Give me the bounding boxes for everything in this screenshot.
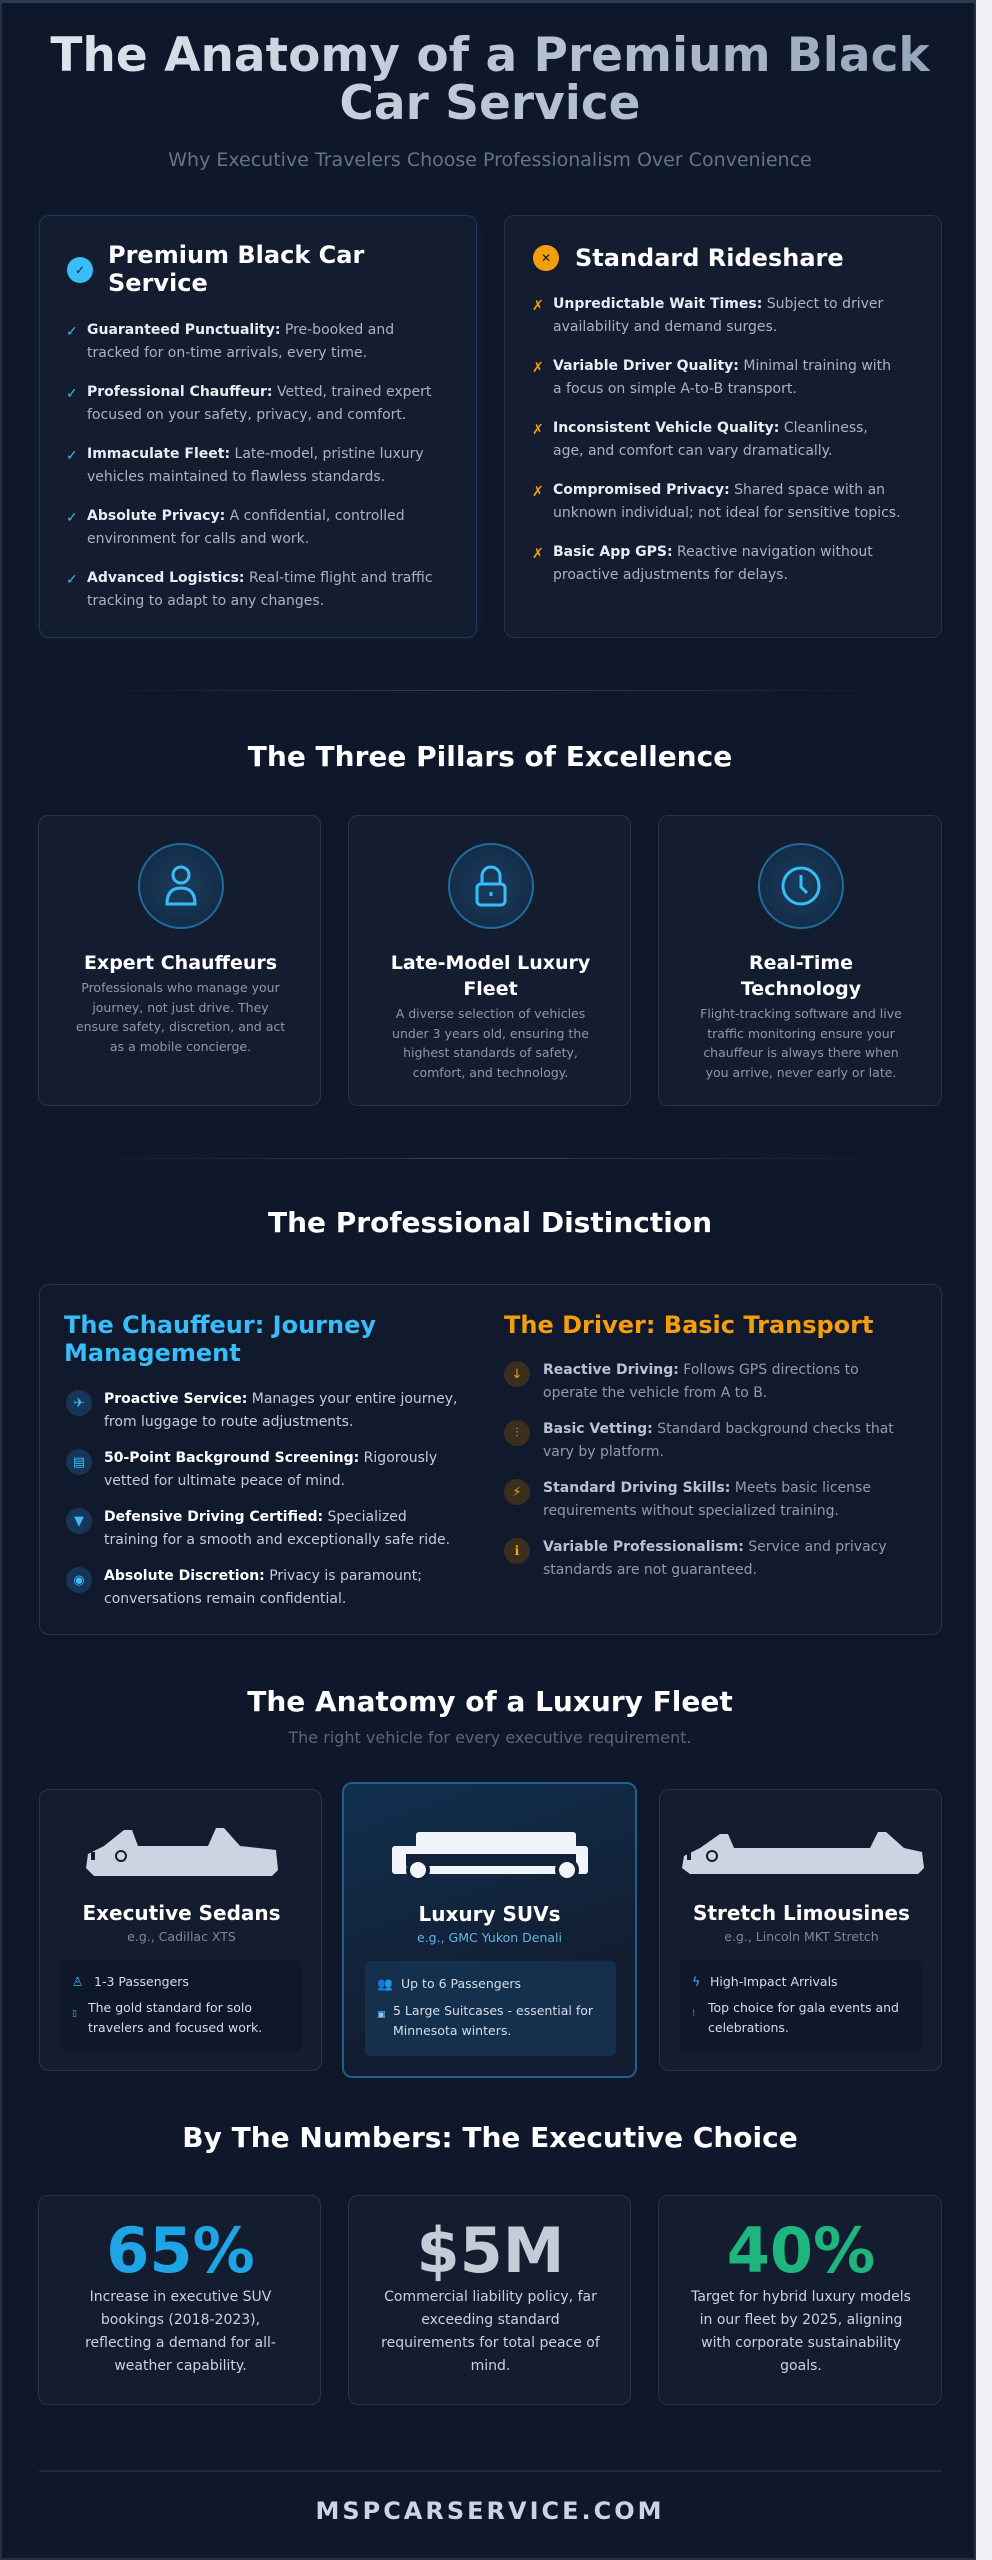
heading: rideshare: Standard Rideshare — [575, 244, 844, 272]
list: rideshare drawbacks: ✗ — [532, 422, 544, 438]
heading: premium: Service — [108, 269, 208, 297]
list: driver: ℹ — [515, 1544, 519, 1558]
icon: x circle: ✕ — [541, 251, 551, 265]
list: premium benefits: Absolute Privacy: A confidential, controlled environment for calls and work. — [87, 508, 405, 547]
list: driver: Standard Driving Skills: Meets basic license requirements without specialized training. — [543, 1480, 871, 1519]
features box: ▣ — [377, 2010, 386, 2020]
list: premium benefits: ✓ — [66, 572, 78, 588]
list: chauffeur — [66, 1390, 458, 1607]
list: premium benefits: Guaranteed Punctuality: Pre-booked and tracked for on-time arrivals, every time. — [87, 322, 394, 361]
features box: ▯ — [72, 2009, 77, 2019]
title: Car Service — [339, 76, 641, 131]
icon: check circle: ✓ — [75, 263, 85, 277]
features box: 👥 — [377, 1976, 393, 1991]
pillar title — [740, 952, 861, 1000]
icon: suv — [392, 1832, 588, 1882]
panel: real-time technology — [658, 815, 942, 1106]
vehicle title: Luxury SUVs — [418, 1902, 560, 1926]
panel: executive sedans — [39, 1789, 322, 2071]
list: chauffeur: ▤ — [73, 1454, 85, 1470]
panel: expert chauffeurs — [38, 815, 321, 1106]
subtitle: fleet: The right vehicle for every executive requirement. — [288, 1728, 692, 1747]
pillar title: Real-Time — [749, 952, 853, 974]
list: driver: ↓ — [512, 1366, 522, 1382]
icon: sedan — [86, 1828, 278, 1876]
icon: lock — [448, 843, 534, 929]
features box: ⁝ — [692, 2008, 695, 2019]
panel: premium black car — [39, 215, 477, 638]
list: chauffeur: ▼ — [74, 1514, 84, 1528]
stat description: Target for hybrid luxury models in our fleet by 2025, aligning with corporate sustainability goals. — [691, 2289, 911, 2374]
panel: standard rideshare — [504, 215, 942, 638]
list: chauffeur: Absolute Discretion: Privacy is paramount; conversations remain confidential. — [104, 1568, 422, 1607]
features box — [60, 1960, 302, 2051]
list: premium benefits: ✓ — [66, 324, 78, 340]
vehicle title: Stretch Limousines — [693, 1901, 910, 1925]
panel: distinction — [39, 1284, 942, 1635]
list: premium benefits: Professional Chauffeur: Vetted, trained expert focused on your safety, privacy, and comfort. — [87, 384, 431, 423]
pillar description: Professionals who manage your journey, not just drive. They ensure safety, discretion, and act as a mobile concierge. — [76, 980, 285, 1054]
list: chauffeur: Defensive Driving Certified: Specialized training for a smooth and exceptionally safe ride. — [104, 1509, 450, 1548]
panel: late-model fleet — [348, 815, 631, 1106]
list: rideshare drawbacks: ✗ — [532, 298, 544, 314]
stat number: 40% — [727, 2214, 875, 2287]
title: The Anatomy of a Premium Black — [50, 28, 930, 83]
stat description: Increase in executive SUV bookings (2018-2023), reflecting a demand for all-weather capability. — [85, 2289, 276, 2374]
icon: x circle — [533, 245, 559, 271]
list: driver: Basic Vetting: Standard background checks that vary by platform. — [543, 1421, 894, 1460]
list: rideshare drawbacks: Inconsistent Vehicle Quality: Cleanliness, age, and comfort can vary dramatically. — [553, 420, 868, 459]
features box: 1-3 Passengers — [94, 1974, 189, 1989]
footer: website: MSPCARSERVICE.COM — [315, 2497, 665, 2525]
heading: chauffeur — [64, 1311, 376, 1367]
list: premium benefits: ✓ — [66, 448, 78, 464]
stat card: 65% — [38, 2195, 321, 2405]
vehicle example: e.g., Cadillac XTS — [127, 1929, 236, 1944]
list: driver — [504, 1361, 894, 1578]
features box: ♙ — [72, 1974, 83, 1989]
stat card: $5M — [348, 2195, 631, 2405]
panel: luxury suvs (highlighted) — [342, 1782, 637, 2078]
features box: Up to 6 Passengers — [401, 1976, 521, 1991]
icon: clock — [758, 843, 844, 929]
features box — [680, 1960, 922, 2051]
pillar title: Technology — [741, 978, 861, 1000]
heading: premium: Premium Black Car — [108, 241, 364, 269]
icon: limousine — [682, 1832, 924, 1874]
icon: person — [138, 843, 224, 929]
list: rideshare drawbacks: ✗ — [532, 484, 544, 500]
list: rideshare drawbacks: Unpredictable Wait Times: Subject to driver availability and demand surges. — [553, 296, 883, 335]
subtitle: Why Executive Travelers Choose Professionalism Over Convenience — [168, 149, 812, 171]
features box: ϟ — [692, 1974, 700, 1989]
heading: luxury fleet: The Anatomy of a Luxury Fleet — [247, 1685, 733, 1718]
pillar description: Flight-tracking software and live traffic monitoring ensure your chauffeur is always there when you arrive, never early or late. — [700, 1006, 902, 1080]
heading: driver: The Driver: Basic Transport — [504, 1311, 873, 1339]
stat card: 40% — [658, 2195, 942, 2405]
list: chauffeur: 50-Point Background Screening: Rigorously vetted for ultimate peace of mind. — [104, 1450, 437, 1489]
list: driver: ⚡ — [512, 1484, 522, 1500]
heading: by the numbers: By The Numbers: The Executive Choice — [182, 2121, 798, 2154]
features box: 5 Large Suitcases - essential for Minnesota winters. — [393, 2003, 593, 2038]
features box: Top choice for gala events and celebrations. — [708, 2000, 899, 2035]
list: premium benefits: ✓ — [66, 386, 78, 402]
stat number: 65% — [106, 2214, 255, 2287]
heading: three pillars: The Three Pillars of Excellence — [248, 740, 732, 773]
list: driver: Variable Professionalism: Service and privacy standards are not guaranteed. — [543, 1539, 887, 1578]
panel: stretch limousines — [659, 1789, 942, 2071]
list: chauffeur: ✈ — [74, 1396, 84, 1410]
list: premium benefits — [66, 322, 433, 609]
list: rideshare drawbacks: ✗ — [532, 360, 544, 376]
heading: chauffeur: Management — [64, 1339, 241, 1367]
stat description: Commercial liability policy, far exceeding standard requirements for total peace of mind. — [381, 2289, 600, 2374]
icon: check circle — [67, 257, 93, 283]
list: premium benefits: Advanced Logistics: Real-time flight and traffic tracking to adapt to any changes. — [87, 570, 433, 609]
list: rideshare drawbacks: ✗ — [532, 546, 544, 562]
heading: professional distinction: The Professional Distinction — [268, 1206, 712, 1239]
vehicle title: Executive Sedans — [82, 1901, 281, 1925]
heading: chauffeur: The Chauffeur: Journey — [64, 1311, 376, 1339]
list: rideshare drawbacks: Basic App GPS: Reactive navigation without proactive adjustments for delays. — [553, 544, 873, 583]
pillar title: Late-Model Luxury Fleet — [391, 952, 590, 1000]
stat number: $5M — [416, 2214, 564, 2287]
list: rideshare drawbacks: Compromised Privacy: Shared space with an unknown individual; not ideal for sensitive topics. — [553, 482, 901, 521]
list: chauffeur: ◉ — [73, 1572, 85, 1588]
list: chauffeur: Proactive Service: Manages your entire journey, from luggage to route adjustments. — [104, 1391, 458, 1430]
list: rideshare drawbacks — [532, 296, 901, 583]
list: driver: ⫶ — [515, 1426, 519, 1440]
features box: The gold standard for solo travelers and focused work. — [88, 2000, 262, 2035]
vehicle example: e.g., Lincoln MKT Stretch — [724, 1929, 879, 1944]
pillar title: Expert Chauffeurs — [84, 952, 277, 974]
features box — [365, 1961, 616, 2056]
list: premium benefits: Immaculate Fleet: Late-model, pristine luxury vehicles maintained to flawless standards. — [87, 446, 424, 485]
vehicle example: e.g., GMC Yukon Denali — [417, 1930, 562, 1945]
title — [2, 32, 978, 128]
list: premium benefits: ✓ — [66, 510, 78, 526]
list: driver: Reactive Driving: Follows GPS directions to operate the vehicle from A to B. — [543, 1362, 859, 1401]
list: rideshare drawbacks: Variable Driver Quality: Minimal training with a focus on simple A-to-B transport. — [553, 358, 891, 397]
features box: High-Impact Arrivals — [710, 1974, 838, 1989]
heading: premium — [108, 241, 364, 297]
pillar description: A diverse selection of vehicles under 3 years old, ensuring the highest standards of safety, comfort, and technology. — [392, 1006, 589, 1080]
